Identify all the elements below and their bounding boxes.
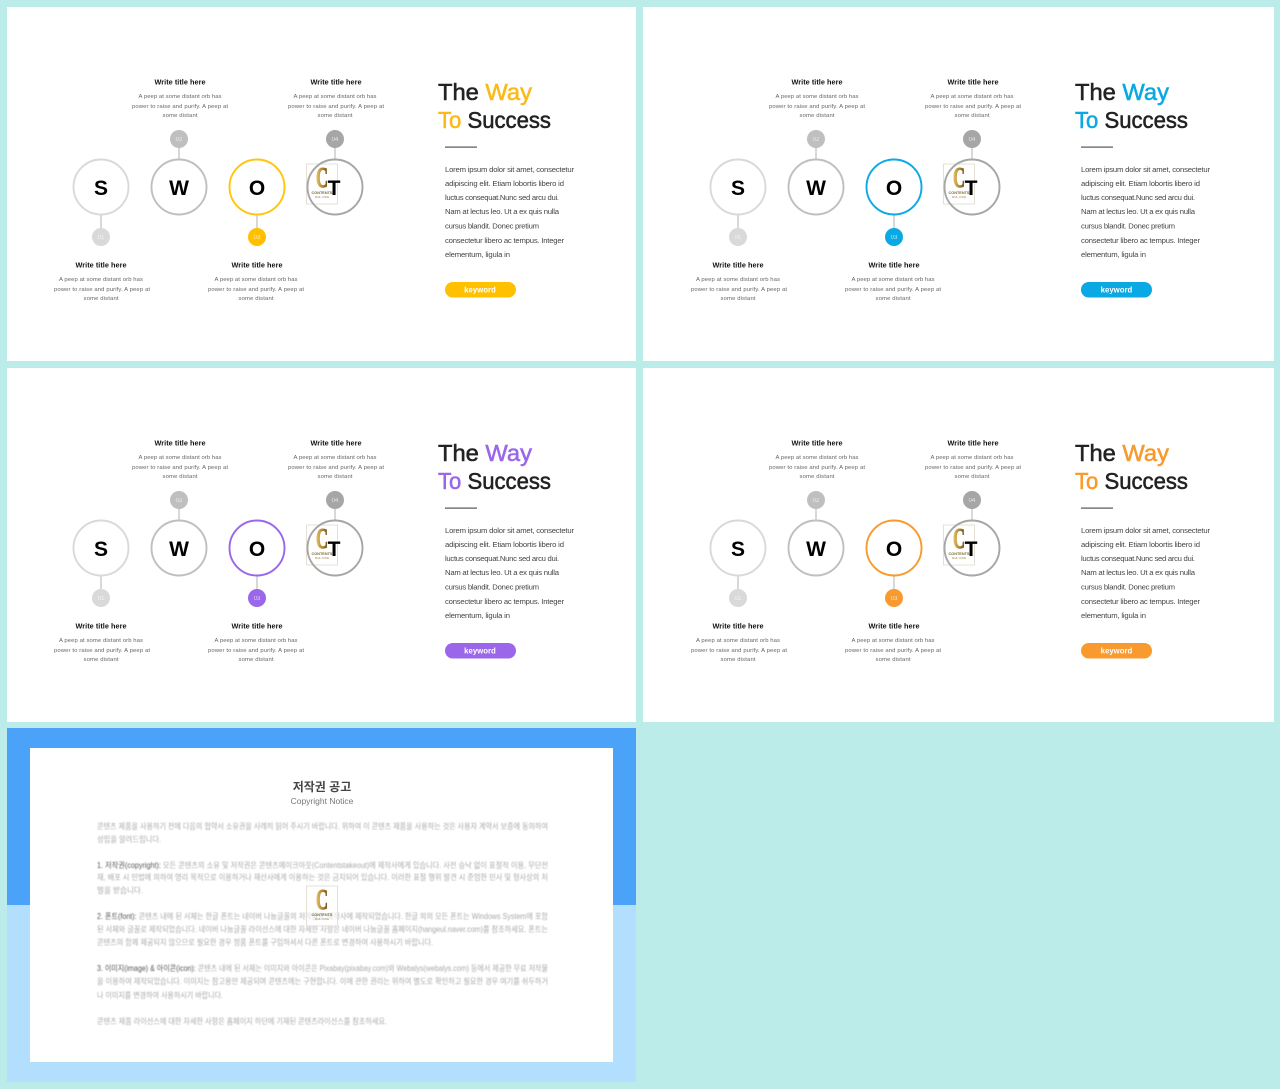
- text block 01: Write title here: [76, 260, 126, 270]
- circle T: [308, 160, 362, 214]
- heading: [1075, 440, 1188, 494]
- text block 02: A peep at some distant orb has: [776, 94, 859, 100]
- badge 03: 03: [891, 596, 898, 602]
- intro paragraph: 콘텐츠 제품을 사용하기 전에 다음의 협약서 소유권을 사례히 읽어 주시기 바랍니다. 위하여 이 콘텐츠 제품을 사용하는 것은 사용자 계약서 보증에 동의하여: [97, 821, 548, 831]
- circle O: O: [886, 177, 902, 200]
- circle W: W: [169, 538, 189, 561]
- heading: The Way: [438, 440, 533, 466]
- circle O: O: [249, 538, 265, 561]
- body text: consectetur libero ac tempus. Integer: [445, 236, 564, 245]
- circle O: [866, 160, 922, 214]
- logo watermark: CONTENTS: [312, 913, 333, 917]
- text block 03: Write title here: [868, 260, 920, 270]
- badge 04: [963, 491, 981, 509]
- section 1: copyright: 재, 배포 시 민법에 의하여 영리 목적으로 이용하거나 재산사에게 이용하는 것은 금지되어 있습니다. 이러한 표절 행위 발견 시 준엄한 민사 및 형사상의 처: [97, 872, 548, 882]
- text block 03: Write title here: [232, 622, 282, 630]
- circle T: T: [965, 177, 978, 200]
- logo watermark: MAIL CODE: [315, 917, 329, 921]
- text block 02: A peep at some distant orb has: [138, 94, 222, 100]
- text block 02: [132, 438, 228, 480]
- keyword button: keyword: [464, 646, 496, 656]
- text block 03: power to raise and purify. A peep at: [208, 287, 304, 293]
- logo watermark: CONTENTS: [312, 552, 333, 556]
- body text: Nam at lectus leo. Ut a ex quis nulla: [445, 568, 560, 577]
- logo watermark: C: [953, 163, 965, 194]
- badge 01: [92, 228, 110, 246]
- badge 03: 03: [891, 235, 898, 241]
- text block 01: power to raise and purify. A peep at: [54, 287, 150, 293]
- text block 03: some distant: [876, 296, 911, 302]
- text block 03: [208, 260, 304, 302]
- body text: Nam at lectus leo. Ut a ex quis nulla: [1081, 568, 1196, 577]
- heading: The Way: [438, 79, 533, 105]
- badge 04: 04: [969, 137, 976, 143]
- body text: [445, 526, 574, 620]
- text block 03: power to raise and purify. A peep at: [208, 648, 304, 654]
- logo watermark: MAIL CODE: [952, 556, 966, 560]
- circle W: [788, 520, 844, 576]
- text block 01: [691, 260, 787, 302]
- body text: elementum, ligula in: [445, 611, 510, 620]
- body text: elementum, ligula in: [1081, 250, 1146, 259]
- text block 03: some distant: [238, 296, 274, 302]
- badge 01: 01: [98, 235, 105, 241]
- badge 04: [326, 491, 344, 509]
- text block 04: Write title here: [948, 438, 998, 448]
- section 1: copyright: 벌을 받습니다.: [97, 885, 143, 895]
- body text: [1081, 165, 1210, 259]
- section 3: image and icon: 3. 이미지(image) & 아이콘(icon): 콘텐츠 내에 된 서체는 이미지와 아이콘은 Pixabay(pixabay.com)와 Webalys(webalys.com) 등에서 제공한 무료 저작물: [97, 963, 548, 973]
- text block 01: some distant: [720, 296, 756, 302]
- heading: To Success: [438, 468, 551, 494]
- text block 02: A peep at some distant orb has: [776, 455, 859, 461]
- circle T: T: [965, 538, 978, 561]
- heading: The Way: [1075, 440, 1170, 466]
- badge 01: 01: [735, 235, 742, 241]
- circle S: [710, 160, 766, 214]
- badge 02: [170, 130, 188, 148]
- text block 01: A peep at some distant orb has: [59, 277, 143, 283]
- notice title: Copyright Notice: [291, 796, 354, 806]
- badge 02: [807, 130, 825, 148]
- section 2: font: 콘텐츠의 함께 제공되지 않으므로 필요한 경우 정품 폰트를 구입하셔서 다른 폰트로 변경하여 사용하시기 바랍니다.: [97, 937, 433, 947]
- badge 03: [248, 228, 266, 246]
- heading: [438, 440, 551, 494]
- body text: adipiscing elit. Etiam lobortis libero id: [1081, 540, 1200, 549]
- body text: Nam at lectus leo. Ut a ex quis nulla: [445, 207, 560, 216]
- text block 03: A peep at some distant orb has: [852, 638, 935, 644]
- badge 01: 01: [98, 596, 105, 602]
- circle T: [944, 520, 1000, 576]
- text block 02: some distant: [800, 113, 835, 119]
- text block 03: [845, 260, 941, 302]
- body text: Lorem ipsum dolor sit amet, consectetur: [445, 526, 574, 535]
- keyword button: keyword: [464, 286, 496, 294]
- body text: consectetur libero ac tempus. Integer: [445, 597, 564, 606]
- text block 01: some distant: [84, 657, 119, 663]
- badge 01: [92, 589, 110, 607]
- closing line: 콘텐츠 제품 라이선스에 대한 자세한 사항은 홈페이지 하단에 기재된 콘텐츠라이선스를 참조하세요.: [97, 1016, 387, 1026]
- text block 03: Write title here: [868, 622, 920, 630]
- body text: luctus consequat.Nunc sed arcu dui.: [445, 193, 559, 202]
- text block 01: [54, 622, 150, 663]
- body text: elementum, ligula in: [445, 250, 510, 259]
- section 2: font: 된 서체와 글꼴로 제작되었습니다. 네이버 나눔글꼴 라이선스에 대한 자세한 사항은 네이버 나눔글꼴 홈페이지(hangeul.naver.com)를 참조하세요. 폰트는: [97, 924, 548, 934]
- badge 02: [807, 491, 825, 509]
- circle S: S: [94, 538, 108, 561]
- logo watermark: [306, 885, 338, 926]
- text block 02: Write title here: [792, 438, 842, 448]
- text block 04: A peep at some distant orb has: [294, 94, 377, 100]
- body text: cursus blandit. Donec pretium: [1081, 222, 1175, 230]
- badge 01: [729, 589, 747, 607]
- text block 04: power to raise and purify. A peep at: [925, 465, 1021, 471]
- keyword button: keyword: [1101, 646, 1133, 656]
- section 3: image and icon: 나 이미지를 변경하여 사용하시기 바랍니다.: [97, 990, 223, 1000]
- body text: adipiscing elit. Etiam lobortis libero id: [1081, 179, 1200, 188]
- text block 02: power to raise and purify. A peep at: [769, 465, 865, 471]
- text block 03: [208, 622, 304, 663]
- text block 02: some distant: [800, 474, 835, 480]
- heading: [438, 79, 551, 133]
- logo watermark: CONTENTS: [312, 191, 333, 195]
- keyword button: keyword: [1101, 286, 1133, 294]
- text block 04: some distant: [318, 474, 353, 480]
- circle W: W: [806, 177, 826, 200]
- logo watermark: MAIL CODE: [315, 556, 329, 560]
- logo watermark: [944, 524, 974, 565]
- circle T: [308, 520, 362, 576]
- panel: SWOT purple: [7, 368, 636, 722]
- circle O: O: [886, 538, 902, 561]
- circle W: [152, 520, 206, 576]
- circle O: [866, 520, 922, 576]
- logo watermark: C: [316, 163, 328, 194]
- circle W: W: [806, 538, 826, 561]
- logo watermark: [306, 524, 338, 565]
- circle S: [710, 520, 766, 576]
- badge 03: [885, 589, 903, 607]
- badge 02: 02: [813, 498, 820, 504]
- badge 03: [885, 228, 903, 246]
- circle W: W: [169, 177, 189, 200]
- heading: To Success: [1075, 468, 1188, 494]
- text block 03: [845, 622, 941, 663]
- logo watermark: MAIL CODE: [952, 195, 966, 199]
- keyword button: [1081, 282, 1152, 298]
- badge 04: 04: [332, 137, 339, 143]
- badge 02: 02: [813, 137, 820, 143]
- text block 01: Write title here: [712, 622, 764, 630]
- text block 02: [132, 78, 228, 119]
- logo watermark: CONTENTS: [949, 552, 970, 556]
- text block 03: A peep at some distant orb has: [214, 277, 298, 283]
- badge 02: 02: [176, 137, 183, 143]
- connectors: [101, 146, 335, 230]
- body text: consectetur libero ac tempus. Integer: [1081, 236, 1200, 245]
- badge 01: [729, 228, 747, 246]
- circle W: [788, 160, 844, 214]
- text block 04: A peep at some distant orb has: [930, 455, 1014, 461]
- logo watermark: MAIL CODE: [315, 195, 329, 199]
- keyword button: [445, 282, 516, 298]
- circle T: T: [328, 177, 341, 200]
- section 1: copyright: [97, 860, 548, 895]
- circle S: [74, 160, 128, 214]
- circle S: S: [94, 177, 108, 200]
- logo watermark: [306, 163, 338, 204]
- text block 02: Write title here: [792, 78, 842, 86]
- section 1: copyright: 1. 저작권(copyright): 모든 콘텐츠의 소유 및 저작권은 콘텐츠메이크아웃(Contentstakeout)에 제작사에게 있습니다. 사전 승낙 없이 표절적 이용, 무단전: [97, 860, 548, 870]
- body text: cursus blandit. Donec pretium: [445, 222, 539, 230]
- badge 04: [326, 130, 344, 148]
- panel: SWOT orange: [643, 368, 1274, 722]
- intro paragraph: [97, 821, 548, 844]
- section 2: font: 2. 폰트(font): 콘텐츠 내에 된 서체는 한글 폰트는 네이버 나눔글꼴의 저작물로 제작사에 제작되었습니다. 한글 외의 모든 폰트는 Windows System에 포함: [97, 911, 549, 921]
- circle T: [944, 160, 1000, 214]
- connectors: [738, 146, 972, 230]
- logo watermark: CONTENTS: [949, 191, 970, 195]
- circle S: S: [731, 538, 745, 561]
- text block 01: A peep at some distant orb has: [696, 638, 780, 644]
- body text: luctus consequat.Nunc sed arcu dui.: [445, 554, 559, 563]
- body text: Lorem ipsum dolor sit amet, consectetur: [445, 165, 574, 174]
- badge 04: [963, 130, 981, 148]
- notice card: [30, 748, 613, 1062]
- text block 03: power to raise and purify. A peep at: [845, 287, 941, 293]
- text block 04: [925, 78, 1021, 119]
- text block 03: some distant: [238, 657, 274, 663]
- panel: SWOT blue: [643, 7, 1274, 361]
- badge 02: 02: [176, 498, 183, 504]
- body text: [445, 165, 574, 259]
- badge 04: 04: [969, 498, 976, 504]
- circle S: S: [731, 177, 745, 200]
- text block 04: [925, 438, 1021, 480]
- text block 02: power to raise and purify. A peep at: [132, 465, 228, 471]
- rule: [1081, 146, 1113, 148]
- text block 04: [288, 78, 384, 119]
- body text: adipiscing elit. Etiam lobortis libero id: [445, 540, 564, 549]
- heading: To Success: [1075, 107, 1188, 133]
- panel: copyright notice: [7, 728, 636, 1082]
- heading: [1075, 79, 1188, 133]
- panel: SWOT yellow: [7, 7, 636, 361]
- text block 02: A peep at some distant orb has: [138, 455, 222, 461]
- logo watermark: C: [953, 524, 965, 555]
- body text: luctus consequat.Nunc sed arcu dui.: [1081, 554, 1195, 563]
- text block 01: A peep at some distant orb has: [696, 277, 780, 283]
- text block 03: some distant: [876, 657, 911, 663]
- text block 02: some distant: [162, 474, 198, 480]
- text block 01: A peep at some distant orb has: [59, 638, 143, 644]
- body text: consectetur libero ac tempus. Integer: [1081, 597, 1200, 606]
- text block 03: A peep at some distant orb has: [214, 638, 298, 644]
- heading: The Way: [1075, 79, 1170, 105]
- text block 01: Write title here: [76, 622, 126, 630]
- circle W: [152, 160, 206, 214]
- text block 04: A peep at some distant orb has: [930, 94, 1014, 100]
- text block 04: power to raise and purify. A peep at: [288, 104, 384, 110]
- logo watermark: [944, 163, 974, 204]
- body text: Lorem ipsum dolor sit amet, consectetur: [1081, 526, 1210, 535]
- text block 03: Write title here: [232, 260, 282, 270]
- heading: To Success: [438, 107, 551, 133]
- text block 04: power to raise and purify. A peep at: [925, 104, 1021, 110]
- badge 03: 03: [254, 235, 261, 241]
- intro paragraph: 성립을 알려드립니다.: [97, 834, 161, 844]
- section 3: image and icon: [97, 963, 548, 1000]
- badge 01: 01: [735, 596, 742, 602]
- connectors: [101, 507, 335, 591]
- body text: [1081, 526, 1210, 620]
- logo watermark: C: [316, 524, 328, 555]
- body text: cursus blandit. Donec pretium: [1081, 582, 1175, 592]
- body text: adipiscing elit. Etiam lobortis libero id: [445, 179, 564, 188]
- section 2: font: [97, 911, 549, 947]
- text block 01: power to raise and purify. A peep at: [691, 648, 787, 654]
- text block 02: [769, 78, 865, 119]
- circle T: T: [328, 538, 341, 561]
- text block 04: some distant: [318, 113, 353, 119]
- circle O: O: [249, 177, 265, 200]
- body text: luctus consequat.Nunc sed arcu dui.: [1081, 193, 1195, 202]
- badge 03: [248, 589, 266, 607]
- text block 03: A peep at some distant orb has: [852, 277, 935, 283]
- text block 01: some distant: [720, 657, 756, 663]
- text block 02: power to raise and purify. A peep at: [132, 104, 228, 110]
- text block 02: Write title here: [154, 78, 206, 86]
- section 3: image and icon: 을 이용하여 제작되었습니다. 이미지는 참고용만 제공되며 콘텐츠에는 구현합니다. 이에 관한 권리는 위하여 별도로 확인하고 필요한 경우 여기를 쉬두하거: [97, 976, 548, 986]
- circle O: [230, 520, 284, 576]
- text block 02: some distant: [162, 113, 198, 119]
- rule: [445, 508, 477, 509]
- text block 04: [288, 438, 384, 480]
- text block 02: Write title here: [154, 438, 206, 448]
- rule: [445, 146, 477, 148]
- text block 03: power to raise and purify. A peep at: [845, 648, 941, 654]
- text block 04: A peep at some distant orb has: [294, 455, 377, 461]
- logo watermark: C: [316, 885, 328, 916]
- text block 01: some distant: [84, 296, 119, 302]
- keyword button: [445, 643, 516, 658]
- text block 04: power to raise and purify. A peep at: [288, 465, 384, 471]
- body text: Lorem ipsum dolor sit amet, consectetur: [1081, 165, 1210, 174]
- notice title: 저작권 공고: [293, 779, 351, 794]
- text block 04: Write title here: [948, 78, 998, 86]
- text block 04: Write title here: [310, 438, 362, 448]
- connectors: [738, 507, 972, 591]
- body text: elementum, ligula in: [1081, 611, 1146, 620]
- text block 01: Write title here: [712, 260, 764, 270]
- badge 03: 03: [254, 596, 261, 602]
- keyword button: [1081, 643, 1152, 658]
- text block 02: [769, 438, 865, 480]
- text block 01: power to raise and purify. A peep at: [54, 648, 150, 654]
- notice title: [291, 779, 354, 806]
- text block 01: [691, 622, 787, 663]
- rule: [1081, 508, 1113, 509]
- text block 01: power to raise and purify. A peep at: [691, 287, 787, 293]
- circle S: [74, 520, 128, 576]
- text block 04: some distant: [954, 474, 990, 480]
- text block 04: some distant: [954, 113, 990, 119]
- circle O: [230, 160, 284, 214]
- text block 01: [54, 260, 150, 302]
- text block 02: power to raise and purify. A peep at: [769, 104, 865, 110]
- badge 02: [170, 491, 188, 509]
- body text: cursus blandit. Donec pretium: [445, 582, 539, 592]
- text block 04: Write title here: [310, 78, 362, 86]
- body text: Nam at lectus leo. Ut a ex quis nulla: [1081, 207, 1196, 216]
- badge 04: 04: [332, 498, 339, 504]
